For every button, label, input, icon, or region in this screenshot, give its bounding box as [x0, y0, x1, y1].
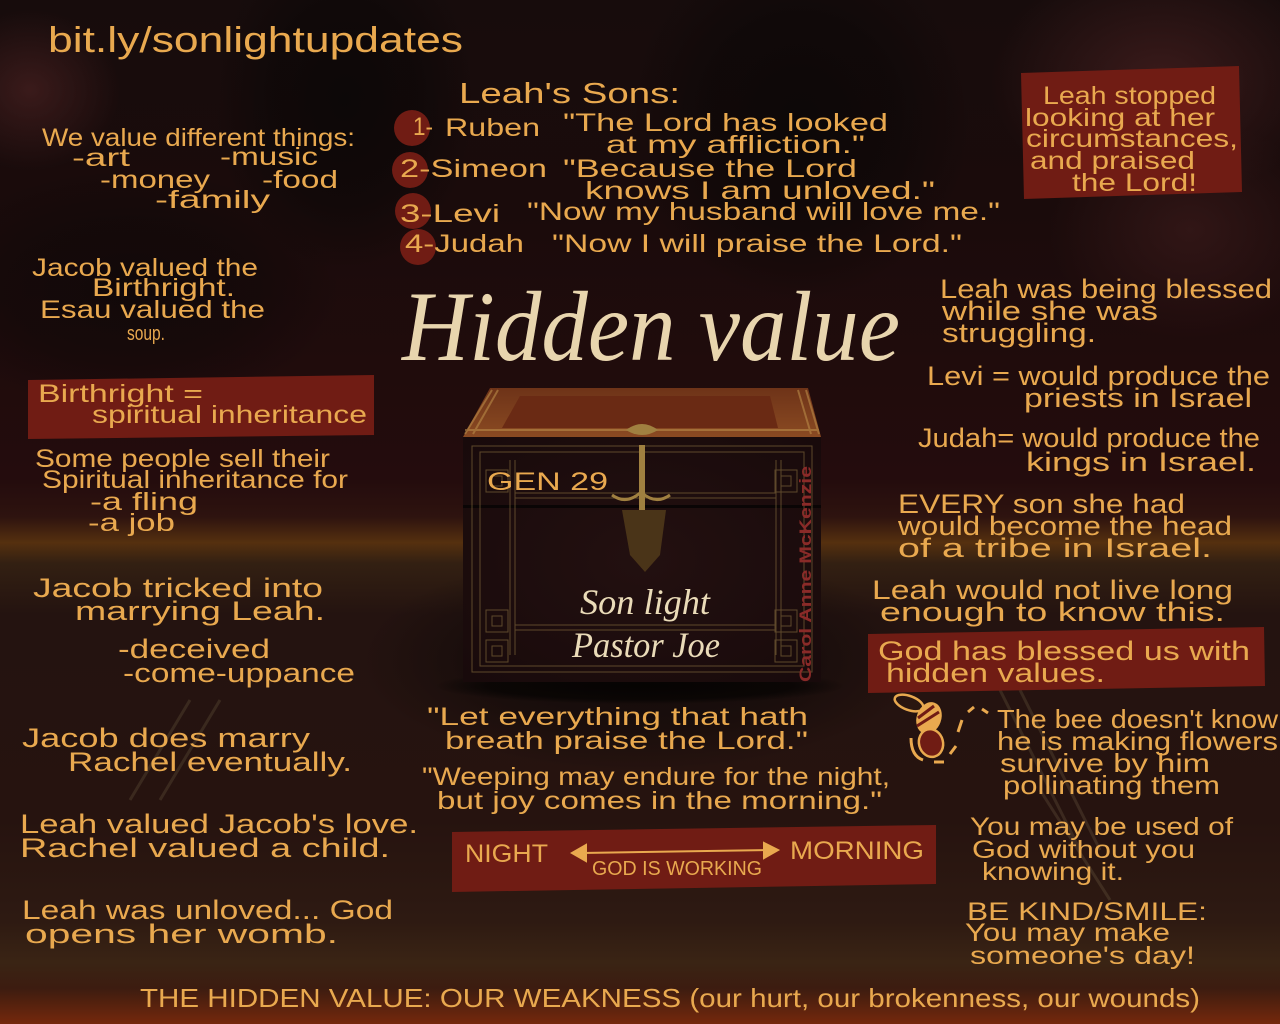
text: used of God: You may be used of [970, 813, 1233, 841]
quote: let everything [427, 703, 808, 755]
text: Leah would not know: enough to know this. [880, 597, 1225, 627]
number circles [392, 110, 436, 265]
text: Jacob tricked: -deceived [118, 634, 270, 664]
chest shadow [435, 668, 845, 704]
text: Leah unloved [22, 895, 393, 949]
text: Levi priests: priests in Israel [1024, 383, 1252, 413]
son 1: Ruben: 1- [413, 113, 433, 141]
title: Hidden value: Hidden value [400, 271, 900, 382]
text: Jacob and Esau: Esau valued the [40, 296, 265, 324]
text: Leah unloved: Leah was unloved... God [22, 895, 393, 925]
text: values: -family [155, 186, 271, 214]
text: be kind: BE KIND/SMILE: [967, 898, 1207, 926]
son 3: Levi: "Now my husband will love me." [527, 198, 1000, 226]
icon: bee [893, 691, 988, 762]
text: selling inheritance: -a job [88, 509, 175, 537]
son 1: Ruben: Ruben [445, 114, 540, 142]
chest clasp [612, 424, 670, 572]
text: Judah kings [918, 423, 1260, 477]
text: values: -food [262, 166, 338, 194]
text: used of God: knowing it. [982, 858, 1124, 886]
callout: Leah stopped [1021, 66, 1242, 199]
son 1: Ruben: at my affliction." [606, 131, 865, 159]
text: Jacob tricked: marrying Leah. [75, 596, 325, 626]
text: be kind: You may make [965, 919, 1170, 947]
text: every son: of a tribe in Israel. [898, 533, 1212, 563]
text: Leah blessed: Leah was being blessed [940, 274, 1272, 304]
son 2: Simeon: 2-Simeon [400, 155, 547, 183]
text: values: -money [100, 166, 211, 194]
quote: weeping: but joy comes in the morning." [437, 787, 882, 815]
chest lid top [463, 388, 821, 437]
son 1: Ruben [413, 109, 888, 159]
text: selling inheritance: -a fling [90, 488, 198, 516]
son 3: Levi [400, 198, 1000, 228]
text: Jacob tricked: Jacob tricked into [33, 573, 323, 603]
text: bee [997, 704, 1278, 800]
text: bee: pollinating them [1003, 770, 1220, 800]
callout: birthright [28, 375, 374, 439]
label: Pastor Joe: Pastor Joe [571, 625, 720, 665]
label: Son light: Son light [580, 582, 711, 622]
text: Jacob tricked: -come-uppance [123, 658, 355, 688]
callout: night to morning: NIGHT [465, 840, 548, 868]
text: be kind: someone's day! [970, 942, 1195, 970]
son 4: Judah: "Now I will praise the Lord." [552, 230, 962, 258]
son 2: Simeon: knows I am unloved." [585, 177, 935, 205]
text: values [42, 124, 355, 214]
text: Levi priests: Levi = would produce the [927, 361, 1270, 391]
text: Judah kings: Judah= would produce the [918, 423, 1260, 453]
text: bee: he is making flowers [997, 726, 1278, 756]
text: used of God [970, 813, 1233, 886]
quote: let everything: "Let everything that hath [427, 703, 808, 731]
text: Leah blessed: while she was [941, 296, 1158, 326]
text: Jacob and Esau [32, 254, 265, 345]
heading: Leah's Sons: Leah's Sons: [459, 78, 680, 110]
text: selling inheritance [35, 445, 348, 537]
text: Leah and Rachel values: Leah valued Jacob's love. [20, 809, 418, 839]
text: Leah would not know: Leah would not live long [872, 575, 1233, 605]
callout: Leah stopped: Leah stopped [1043, 82, 1216, 110]
text: Jacob marries Rachel [22, 723, 352, 777]
callout: night to morning: MORNING [790, 837, 924, 865]
son 4: Judah [405, 230, 962, 258]
callout: Leah stopped: circumstances, [1026, 125, 1238, 153]
son 2: Simeon [400, 155, 935, 205]
text: Jacob marries Rachel: Jacob does marry [22, 723, 311, 753]
text: bee: survive by him [1000, 748, 1210, 778]
label: GEN 29: GEN 29 [487, 468, 608, 496]
callout: night to morning [452, 825, 936, 892]
text: Leah blessed: struggling. [942, 318, 1096, 348]
text: Jacob marries Rachel: Rachel eventually. [68, 747, 352, 777]
Leah's sons list [392, 78, 1000, 265]
text: Jacob and Esau: Jacob valued the [32, 254, 258, 282]
son 4: Judah: 4-Judah [405, 230, 524, 258]
son 3: Levi: 3-Levi [400, 200, 500, 228]
text: Jacob tricked [33, 573, 355, 688]
text: every son: EVERY son she had [898, 489, 1185, 519]
son 2: Simeon: "Because the Lord [563, 155, 857, 183]
text: values: -art [72, 144, 130, 172]
callout: birthright: spiritual inheritance [92, 401, 367, 429]
arrow: double headed [572, 843, 778, 861]
callout: hidden values: God has blessed us with [878, 636, 1250, 666]
callout: hidden values: hidden values. [886, 658, 1105, 688]
text: Leah would not know [872, 575, 1233, 627]
text: values: We value different things: [42, 124, 355, 152]
quote: let everything: breath praise the Lord." [445, 727, 808, 755]
text: selling inheritance: Spiritual inheritance for [42, 466, 348, 494]
text: Jacob and Esau: Birthright. [92, 274, 235, 302]
chest front [463, 437, 821, 682]
callout: birthright: Birthright = [38, 380, 203, 408]
callout: Leah stopped: the Lord! [1072, 169, 1197, 197]
text: Leah and Rachel values [20, 809, 418, 863]
text: every son [897, 489, 1232, 563]
callout: Leah stopped: and praised [1030, 147, 1195, 175]
text: Leah and Rachel values: Rachel valued a child. [20, 833, 390, 863]
callout: Leah stopped: looking at her [1025, 104, 1215, 132]
credit: Carol Anne McKenzie: Carol Anne McKenzie [796, 466, 815, 682]
callout: night to morning: GOD IS WORKING [592, 858, 762, 880]
quote: weeping [422, 763, 890, 815]
text: bee: The bee doesn't know [997, 704, 1278, 734]
callout: hidden values [868, 627, 1265, 693]
url: bit.ly/sonlightupdates [48, 19, 463, 60]
text: every son: would become the head [897, 511, 1232, 541]
treasure chest [435, 388, 845, 704]
son 1: Ruben: "The Lord has looked [563, 109, 888, 137]
text: values: -music [220, 143, 318, 171]
text: be kind [965, 898, 1207, 970]
text: used of God: God without you [972, 836, 1195, 864]
text: Levi priests [927, 361, 1270, 413]
text: selling inheritance: Some people sell their [35, 445, 330, 473]
text: Judah kings: kings in Israel. [1026, 447, 1256, 477]
summary line: THE HIDDEN VALUE: OUR WEAKNESS (our hurt, our brokenness, our wounds) [140, 983, 1200, 1013]
quote: weeping: "Weeping may endure for the night, [422, 763, 890, 791]
text: Leah unloved: opens her womb. [25, 919, 338, 949]
text: Jacob and Esau: soup. [127, 323, 165, 345]
text: Leah blessed [940, 274, 1272, 348]
